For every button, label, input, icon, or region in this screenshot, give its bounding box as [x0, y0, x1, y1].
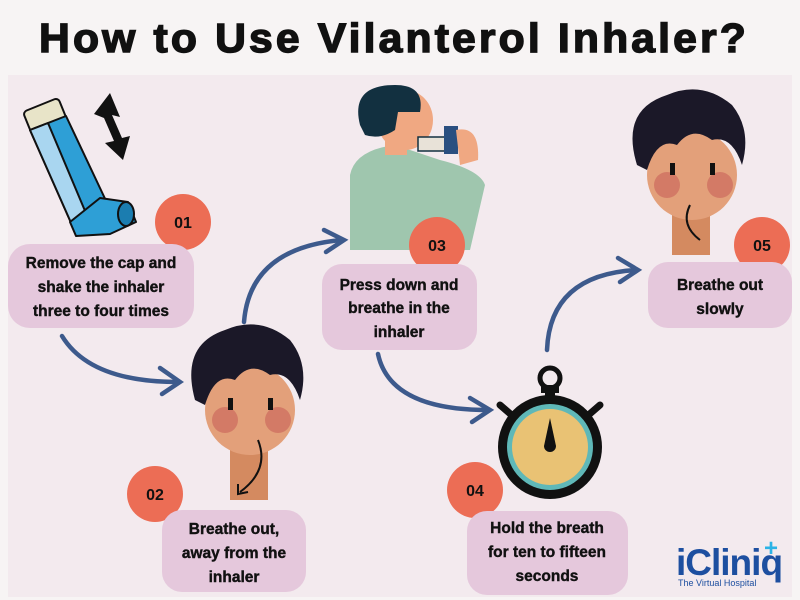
icon: man using inhaler	[350, 85, 485, 250]
logo: The Virtual Hospital	[678, 578, 756, 588]
text box 4: Hold the breath	[490, 520, 604, 537]
step 5	[632, 89, 792, 328]
text box 5	[648, 262, 792, 328]
step 1	[8, 93, 211, 328]
title: How to Use Vilanterol Inhaler?	[39, 15, 749, 61]
text box 3: inhaler	[374, 324, 424, 341]
text box 2	[162, 510, 306, 592]
text box 4	[467, 511, 628, 595]
step 3	[322, 85, 485, 350]
icon: face breathing out slowly	[632, 89, 745, 255]
arrow 2 to 3	[244, 230, 344, 322]
text box 5: slowly	[696, 301, 744, 318]
text box 4: for ten to fifteen	[488, 544, 606, 561]
step 4	[447, 368, 628, 595]
text box 3: Press down and	[340, 277, 458, 294]
arrow 4 to 5	[547, 258, 638, 350]
step 2	[127, 324, 306, 592]
number 02	[127, 466, 183, 522]
text box 1	[8, 244, 194, 328]
number 01: 01	[174, 215, 192, 232]
number 01	[155, 194, 211, 250]
icon: stopwatch	[498, 368, 602, 499]
icon: face breathing out	[191, 324, 303, 500]
number 04	[447, 462, 503, 518]
arrow 3 to 4	[378, 354, 490, 422]
number 05	[734, 217, 790, 273]
number 02: 02	[146, 487, 164, 504]
number 03	[409, 217, 465, 273]
text box 1: three to four times	[33, 303, 169, 320]
arrow 1 to 2	[62, 336, 180, 394]
icon: double arrow	[94, 93, 130, 160]
text box 2: away from the	[182, 545, 286, 562]
logo: iCliniq	[676, 542, 782, 583]
logo: +	[764, 535, 778, 562]
number 03: 03	[428, 238, 446, 255]
number 05: 05	[753, 238, 771, 255]
number 04: 04	[466, 483, 484, 500]
text box 2: inhaler	[209, 569, 259, 586]
text box 3: breathe in the	[348, 300, 450, 317]
text box 4: seconds	[516, 568, 578, 585]
text box 5: Breathe out	[677, 277, 763, 294]
text box 1: shake the inhaler	[38, 279, 164, 296]
text box 2: Breathe out,	[189, 521, 279, 538]
icon: inhaler	[23, 98, 136, 236]
text box 3	[322, 264, 477, 350]
text box 1: Remove the cap and	[26, 255, 176, 272]
